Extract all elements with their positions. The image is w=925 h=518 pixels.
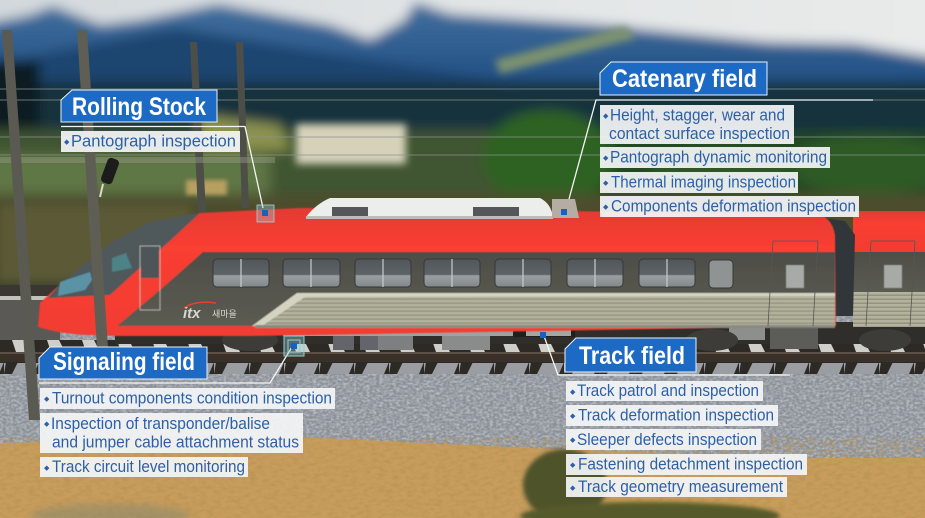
item: ◆	[570, 437, 576, 444]
item: contact surface inspection	[609, 125, 790, 143]
heading: Catenary field	[612, 65, 757, 93]
panel: rolling stock	[61, 90, 274, 222]
item: ◆	[570, 389, 576, 396]
door and logo: 새마을	[212, 309, 237, 319]
item: and jumper cable attachment status	[52, 434, 299, 452]
marker	[257, 205, 274, 222]
near catenary poles and insulator	[2, 30, 120, 420]
item: ◆	[603, 113, 609, 120]
door and logo: itx	[183, 305, 201, 322]
item: Pantograph dynamic monitoring	[610, 148, 827, 166]
item: Track geometry measurement	[578, 478, 783, 496]
item: ◆	[603, 155, 609, 162]
item: ◆	[44, 421, 50, 428]
item: Fastening detachment inspection	[578, 456, 803, 474]
panel: track field	[540, 332, 807, 497]
item: ◆	[603, 180, 609, 187]
item: ◆	[44, 465, 50, 472]
marker	[284, 336, 304, 356]
item: Track circuit level monitoring	[52, 458, 245, 476]
item: ◆	[64, 139, 70, 146]
heading: Signaling field	[53, 348, 195, 376]
marker	[561, 209, 567, 215]
heading: Track field	[579, 342, 685, 370]
train	[38, 198, 925, 351]
item: ◆	[603, 204, 609, 211]
panel: catenary field	[561, 62, 873, 217]
marker	[540, 332, 546, 338]
item: Pantograph inspection	[71, 132, 236, 150]
item	[600, 105, 794, 144]
roof cowling	[306, 198, 579, 219]
door and logo	[183, 241, 818, 326]
leader line	[569, 100, 873, 199]
panel: signaling field	[39, 336, 335, 477]
railway track	[0, 340, 925, 374]
item: Thermal imaging inspection	[611, 174, 796, 192]
item: ◆	[570, 413, 576, 420]
leader line	[39, 347, 292, 383]
second car	[853, 211, 925, 327]
item: Track deformation inspection	[578, 406, 774, 424]
heading: Rolling Stock	[72, 93, 206, 121]
first car body and nose	[38, 208, 836, 336]
wires and far poles	[0, 42, 925, 212]
item: Sleeper defects inspection	[577, 431, 757, 449]
ground: ballast, sand and grass	[0, 285, 925, 518]
item: ◆	[44, 396, 50, 403]
item	[40, 413, 303, 453]
item: Height, stagger, wear and	[610, 106, 785, 124]
undercarriage	[115, 322, 925, 351]
item: ◆	[570, 462, 576, 469]
item: Inspection of transponder/balise	[51, 415, 270, 433]
item: Turnout components condition inspection	[52, 390, 332, 408]
item: ◆	[570, 485, 576, 492]
leader line	[61, 126, 263, 208]
item: Components deformation inspection	[611, 198, 856, 216]
windows	[213, 259, 733, 288]
leader line	[544, 336, 790, 375]
item: Track patrol and inspection	[577, 382, 759, 400]
gangway	[823, 218, 855, 316]
